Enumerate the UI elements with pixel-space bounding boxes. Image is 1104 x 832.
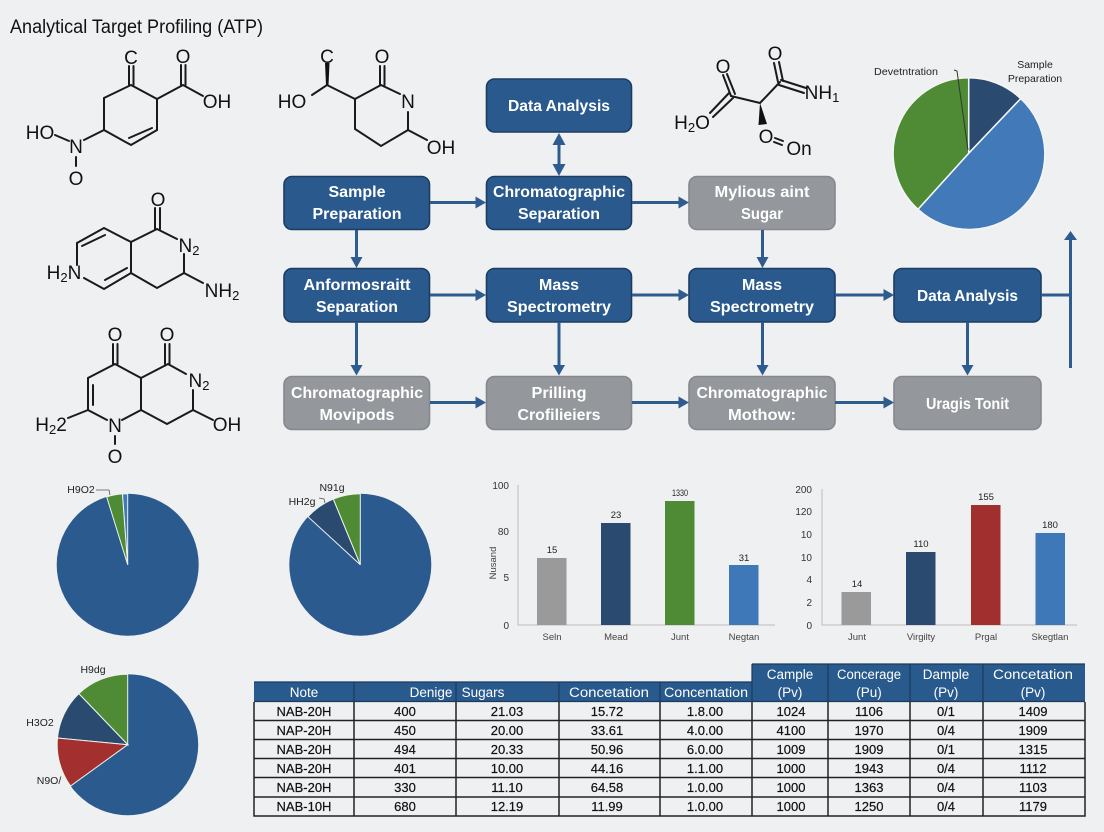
flow box: Prilling Crofilieiers: Crofilieiers <box>518 407 601 424</box>
molecule: top centre right: NH <box>805 83 832 104</box>
table row 6: 0/4 <box>937 799 955 814</box>
table row 2: 1909 <box>1019 723 1047 738</box>
flow box: Uragis Tonit <box>894 376 1041 430</box>
table row 6: 12.19 <box>491 799 523 814</box>
flow box: Prilling Crofilieiers <box>486 376 632 430</box>
flow box: Data Analysis right <box>894 268 1041 322</box>
table row 4: 401 <box>394 761 416 776</box>
arrow: Chromatographic to Mylious <box>632 196 689 208</box>
flow box: Chromatographic Movipods: Chromatographic <box>291 385 423 402</box>
arrow: Sample Preparation down <box>350 230 362 268</box>
arrow: Data Analysis down <box>962 322 974 376</box>
bar chart: right: 2 <box>806 598 812 609</box>
table row 4: 1000 <box>777 761 805 776</box>
title: Analytical Target Profiling (ATP) <box>10 17 263 38</box>
table header: Concetation <box>993 667 1073 682</box>
pie chart: N91g and HH2g: N91g <box>319 482 345 494</box>
bar chart: left: 31 <box>739 553 749 564</box>
table row 4: 1112 <box>1020 761 1046 776</box>
bar chart: right: Skegtlan <box>1032 632 1068 643</box>
molecule: lower left: O <box>108 325 122 346</box>
table row 1: 1024 <box>777 704 805 719</box>
table row 6: 1000 <box>777 799 805 814</box>
arrow: Mass to Data Analysis <box>835 289 894 301</box>
pie chart: lower left: N9O/ <box>37 775 61 787</box>
flow box: Anformosraitt Separation: Anformosraitt <box>304 277 411 294</box>
table row 3 <box>277 742 1047 757</box>
molecule: middle left: 2 <box>60 270 68 285</box>
molecule: middle left: 2 <box>192 243 199 258</box>
flow box: Mylious aint Sugar: Sugar <box>741 206 783 223</box>
table row 5: 330 <box>394 780 416 795</box>
flow box: Sample Preparation: Preparation <box>312 206 402 223</box>
molecule: middle left: N <box>68 263 81 284</box>
molecule: lower left: H <box>35 415 49 436</box>
molecule: top centre left: N <box>401 92 415 113</box>
arrow: Mass down 2 <box>756 322 768 376</box>
flow box: Data Analysis top <box>486 79 632 132</box>
arrow: Prilling to Chromatographic Mothow <box>632 396 689 408</box>
flow box: Mass Spectrometry 1 <box>486 268 632 322</box>
table row 6: 1250 <box>855 799 883 814</box>
table row 6: NAB-10H <box>277 799 331 814</box>
flow box: Chromatographic Movipods <box>284 376 430 430</box>
table row 5: 1363 <box>855 780 883 795</box>
table row 3: 1315 <box>1019 742 1047 757</box>
flow box: Mass Spectrometry 1: Mass <box>539 277 579 294</box>
table row 3: 0/1 <box>937 742 955 757</box>
molecule: top left: C <box>124 48 138 69</box>
table header: Concetation <box>569 685 649 700</box>
bar chart: right: Prgal <box>975 632 997 643</box>
molecule: top centre right: On <box>786 139 812 160</box>
table row 1: 21.03 <box>491 704 523 719</box>
molecule: middle left: H <box>47 263 60 284</box>
molecule: lower left: OH <box>213 415 241 436</box>
pie chart: lower left <box>26 664 198 815</box>
table header: Concerage <box>837 667 901 682</box>
table row 1: 15.72 <box>591 704 623 719</box>
table row 5: 64.58 <box>591 780 623 795</box>
table row 2: 4.0.00 <box>687 723 723 738</box>
molecule: lower left: O <box>108 447 122 468</box>
bar chart: right: 10 <box>801 530 812 541</box>
flow box: Chromatographic Mothow: Mothow: <box>728 407 796 424</box>
flow box: Chromatographic Separation: Chromatographic <box>493 184 625 201</box>
flow box: Mass Spectrometry 2 <box>689 268 835 322</box>
table row 5: 1.0.00 <box>687 780 723 795</box>
molecule: top centre left: O <box>375 47 389 68</box>
table row 6 <box>277 799 1047 814</box>
table row 6: 11.99 <box>591 799 623 814</box>
bar chart: left: Negtan <box>729 632 759 643</box>
bar chart: right: 180 <box>1042 520 1058 531</box>
molecule: top centre right <box>674 44 839 160</box>
table header <box>254 664 1085 702</box>
table row 2: 20.00 <box>491 723 523 738</box>
molecule: lower left: 2 <box>56 415 67 436</box>
table header: Sugars <box>462 685 505 700</box>
table row 3: 1009 <box>777 742 805 757</box>
table row 5: 1000 <box>777 780 805 795</box>
bar chart: right: 110 <box>913 539 929 550</box>
molecule: top centre right: O <box>716 57 730 78</box>
pie chart: top right: Preparation <box>1008 73 1062 85</box>
arrow: Anformosraitt down <box>350 322 362 376</box>
pie chart: top right: Devetntration <box>874 66 938 78</box>
table row 3: 1909 <box>855 742 883 757</box>
pie chart: N91g and HH2g <box>289 482 431 636</box>
table row 6: 680 <box>394 799 416 814</box>
flow box: Mass Spectrometry 2: Spectrometry <box>710 299 814 316</box>
table row 5: 1103 <box>1019 780 1047 795</box>
table row 4: 1943 <box>855 761 883 776</box>
table row 4: 10.00 <box>491 761 523 776</box>
table row 4: NAB-20H <box>277 761 331 776</box>
molecule: top left: OH <box>203 92 231 113</box>
table row 5 <box>277 780 1047 795</box>
flow box: Sample Preparation: Sample <box>328 184 386 201</box>
molecule: top left: HO <box>26 123 54 144</box>
table row 2: 33.61 <box>591 723 623 738</box>
molecule: top centre left <box>278 47 455 159</box>
table row 3: 494 <box>394 742 416 757</box>
arrow: Mass down 1 <box>553 322 565 376</box>
bar chart: left: 15 <box>547 545 557 556</box>
molecule: top centre right: O <box>768 44 782 65</box>
molecule: top centre right: 1 <box>832 90 839 105</box>
pie chart: H9O2: H9O2 <box>67 484 95 496</box>
arrow: Chromatographic Movipods to Prilling <box>430 396 486 408</box>
table header: Cample <box>767 667 813 682</box>
table row 5: NAB-20H <box>277 780 331 795</box>
molecule: top centre left: OH <box>427 138 455 159</box>
table row 5: 0/4 <box>937 780 955 795</box>
bar chart: left: 5 <box>503 573 509 584</box>
molecule: middle left: NH <box>205 281 232 302</box>
arrow: Data Analysis to Chromatographic double-headed <box>552 133 566 176</box>
molecule: middle left: N <box>179 236 192 257</box>
table row 3: NAB-20H <box>277 742 331 757</box>
flow box: Anformosraitt Separation: Separation <box>316 299 398 316</box>
flow box: Mylious aint Sugar: Mylious aint <box>714 184 810 201</box>
table row 1: NAB-20H <box>277 704 331 719</box>
table header: (Pv) <box>1021 685 1045 700</box>
bar chart: right: Virgilty <box>907 632 935 643</box>
bar chart: right: 200 <box>795 485 812 496</box>
bar chart: left: 100 <box>492 481 509 492</box>
table row 2 <box>277 723 1047 738</box>
table row 4: 0/4 <box>937 761 955 776</box>
table row 1: 1409 <box>1019 704 1047 719</box>
table row 2: 450 <box>394 723 416 738</box>
flow box: Anformosraitt Separation <box>284 268 430 322</box>
molecule: lower left: O <box>160 325 174 346</box>
arrow: Data Analysis up and out <box>1041 231 1077 368</box>
molecule: top centre right: O <box>759 127 773 148</box>
table row 1: 1.8.00 <box>687 704 723 719</box>
table row 1 <box>277 704 1047 719</box>
molecule: lower left: N <box>189 371 202 392</box>
table header: (Pv) <box>934 685 958 700</box>
bar chart: right: 4 <box>806 575 812 586</box>
flow box: Chromatographic Movipods: Movipods <box>320 407 395 424</box>
pie chart: H9O2 <box>57 484 199 636</box>
pie chart: top right <box>874 59 1062 229</box>
table row 2: NAP-20H <box>277 723 331 738</box>
molecule: top left <box>26 47 231 190</box>
molecule: top left: N <box>69 137 83 158</box>
flow box: Mass Spectrometry 2: Mass <box>742 277 782 294</box>
table header: (Pu) <box>856 685 882 700</box>
molecule: middle left: 2 <box>232 288 239 303</box>
molecule: top left: O <box>176 47 190 68</box>
flow box: Chromatographic Mothow: Chromatographic <box>696 385 828 402</box>
table row 1: 400 <box>394 704 416 719</box>
bar chart: right <box>795 485 1077 643</box>
flow box: Prilling Crofilieiers: Prilling <box>532 385 586 402</box>
data table <box>254 664 1085 816</box>
flow box: Data Analysis top: Data Analysis <box>508 98 610 115</box>
bar chart: left <box>488 481 775 643</box>
table row 2: 4100 <box>777 723 805 738</box>
table header: Note <box>290 685 318 700</box>
bar chart: left: 1330 <box>672 488 688 499</box>
table grid <box>254 702 1085 816</box>
arrow: Sample Preparation to Chromatographic <box>430 196 486 208</box>
bar chart: left: 0 <box>503 621 509 632</box>
flow box: Mylious aint Sugar <box>689 176 835 230</box>
table row 1: 1106 <box>855 704 883 719</box>
table row 4 <box>277 761 1046 776</box>
table row 3: 20.33 <box>491 742 523 757</box>
flow box: Chromatographic Separation <box>486 176 632 230</box>
bar chart: left: Nusand <box>488 547 499 579</box>
bar chart: left: Seln <box>542 632 562 643</box>
molecule: lower left: 2 <box>49 422 56 437</box>
pie chart: lower left: H9dg <box>80 664 106 676</box>
flow box: Sample Preparation <box>284 176 430 230</box>
table header: Concentation <box>664 685 748 700</box>
table row 4: 44.16 <box>591 761 623 776</box>
bar chart: right: Junt <box>848 632 866 643</box>
pie chart: N91g and HH2g: HH2g <box>289 496 316 508</box>
molecule: lower left <box>35 325 241 468</box>
molecule: top centre right: H <box>674 113 688 134</box>
table row 3: 50.96 <box>591 742 623 757</box>
bar chart: right: 0 <box>806 621 812 632</box>
table row 6: 1.0.00 <box>687 799 723 814</box>
bar chart: left: 80 <box>498 527 509 538</box>
molecule: top centre right: 2 <box>688 120 695 135</box>
molecule: top left: O <box>69 169 83 190</box>
molecule: top centre left: C <box>320 47 334 68</box>
molecule: lower left: 2 <box>202 378 209 393</box>
table row 5: 11.10 <box>491 780 523 795</box>
arrow: Chromatographic Mothow to Uragis <box>835 396 894 408</box>
molecule: middle left: O <box>151 190 165 211</box>
molecule: top centre left: HO <box>278 92 306 113</box>
arrow: Anformosraitt to Mass <box>430 289 486 301</box>
table header: Denige <box>410 685 452 700</box>
flow box: Chromatographic Mothow <box>689 376 835 430</box>
table row 4: 1.1.00 <box>687 761 723 776</box>
flow box: Mass Spectrometry 1: Spectrometry <box>507 299 611 316</box>
bar chart: right: 10 <box>801 553 812 564</box>
bar chart: left: 23 <box>611 510 621 521</box>
flow box: Chromatographic Separation: Separation <box>518 206 600 223</box>
bar chart: right: 14 <box>852 579 862 590</box>
table row 1: 0/1 <box>937 704 955 719</box>
bar chart: left: Junt <box>671 632 689 643</box>
table row 2: 1970 <box>855 723 883 738</box>
molecule: lower left: N <box>108 416 122 437</box>
table header: (Pv) <box>778 685 802 700</box>
pie chart: lower left: H3O2 <box>26 717 54 729</box>
table row 6: 1179 <box>1019 799 1047 814</box>
flow box: Uragis Tonit: Uragis Tonit <box>926 396 1010 413</box>
pie chart: top right: Sample <box>1017 59 1053 71</box>
arrow: Mass to Mass <box>632 289 689 301</box>
flow box: Data Analysis right: Data Analysis <box>917 288 1018 305</box>
bar chart: left: Mead <box>604 632 628 643</box>
table header: Dample <box>923 667 969 682</box>
arrow: Mylious down <box>756 230 768 268</box>
molecule: top centre right: O <box>695 113 710 134</box>
table row 2: 0/4 <box>937 723 955 738</box>
table row 3: 6.0.00 <box>687 742 723 757</box>
bar chart: right: 120 <box>795 507 812 518</box>
bar chart: right: 155 <box>978 492 994 503</box>
molecule: middle left <box>47 190 239 303</box>
